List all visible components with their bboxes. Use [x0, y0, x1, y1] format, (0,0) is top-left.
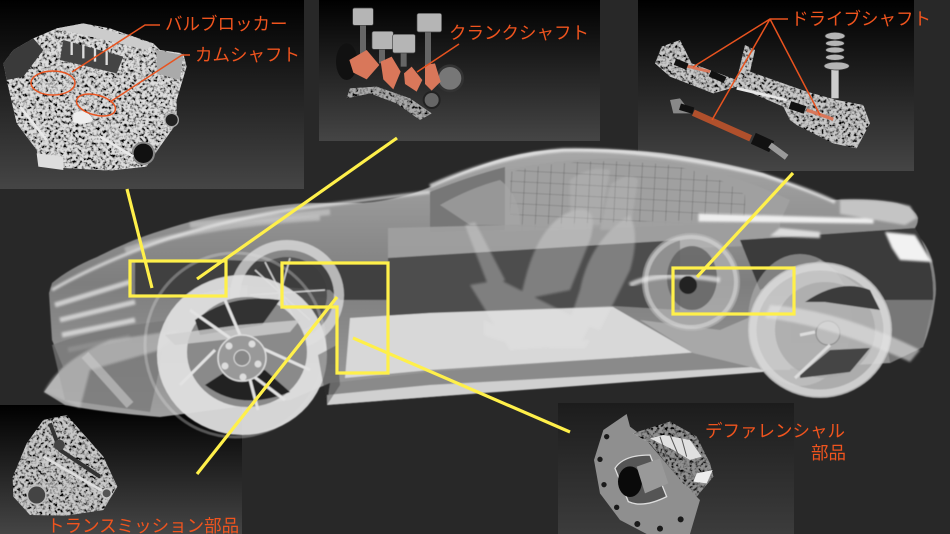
box: engine area [130, 261, 226, 296]
panel: transmission [0, 405, 242, 534]
car x-ray illustration [44, 149, 936, 437]
leader: engine to hood box [127, 189, 152, 288]
car body [44, 149, 936, 417]
car: hood highlights [52, 192, 430, 350]
icon: transmission part [13, 415, 117, 516]
panel: differential [558, 403, 794, 534]
car: rear highlights [700, 200, 932, 262]
callout: valve rocker [31, 14, 288, 95]
car: cabin dark panel [388, 240, 680, 318]
car: roof highlight [430, 150, 835, 202]
car: near rear wheel [748, 254, 920, 398]
label: differential parts [705, 421, 846, 463]
car: rear dark section [740, 228, 933, 300]
icon: engine [3, 23, 187, 171]
leader: drive shaft [697, 173, 793, 277]
panel: drive shaft [638, 0, 931, 171]
highlight: yellow leader lines and boxes [127, 138, 794, 474]
callout: crankshaft: クランクシャフト [449, 23, 589, 43]
leader: crankshaft panel to hood box [197, 138, 397, 279]
box: transmission and differential area [282, 263, 388, 373]
callout: camshaft: カムシャフト [195, 45, 300, 65]
icon: pistons and crankshaft [336, 8, 463, 120]
car: sill stripes [327, 352, 770, 405]
callout: valve rocker: バルブロッカー [165, 14, 288, 34]
panel: engine [0, 0, 304, 189]
car: rear bumper panel [880, 300, 933, 363]
label: differential parts: デファレンシャル [705, 421, 845, 441]
icon: differential part [594, 414, 713, 534]
callout: camshaft [74, 45, 300, 120]
panel: crankshaft [319, 0, 600, 141]
car: far rear wheel [630, 233, 740, 331]
leader: transmission [197, 297, 337, 474]
car: lower front bumper [44, 320, 180, 412]
car: far front wheel [235, 245, 339, 345]
car: door band [388, 218, 780, 258]
car: seats [465, 169, 638, 350]
callout: drive shaft [693, 9, 931, 120]
leader: differential [353, 338, 570, 432]
callout: crankshaft [417, 23, 589, 72]
car: near front wheel [157, 275, 327, 435]
label: differential parts: 部品 [811, 443, 846, 463]
box: rear drive area [673, 268, 794, 314]
car: front hood dark area [135, 260, 388, 300]
car: rear quarter panel [640, 300, 790, 370]
callout: drive shaft: ドライブシャフト [791, 9, 931, 29]
car: front wheel arch [145, 253, 325, 437]
car: floor [345, 307, 693, 378]
icon: suspension and drive shaft [655, 32, 870, 157]
car: window area with grid [430, 159, 790, 232]
car: door sill shadow [318, 345, 340, 405]
